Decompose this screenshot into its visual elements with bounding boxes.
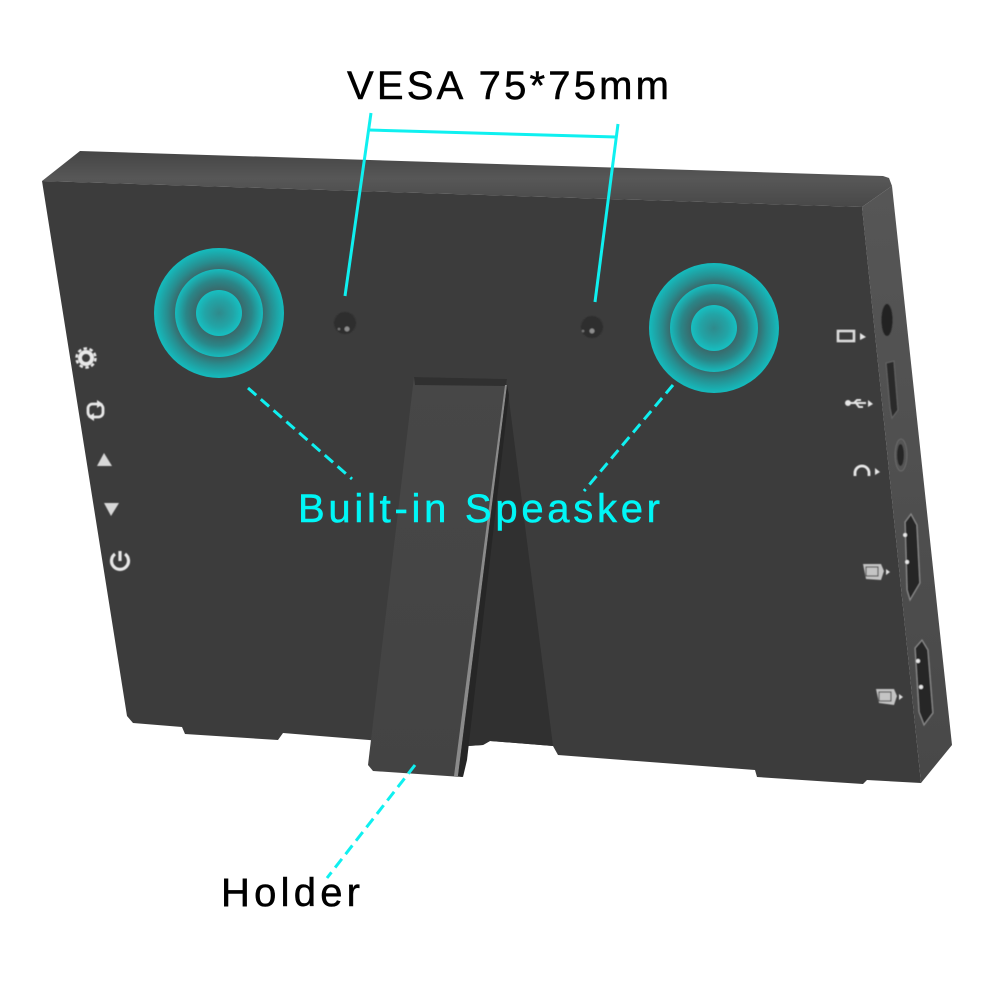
right speaker	[649, 263, 779, 393]
port: HDMI two	[915, 640, 933, 725]
VESA bracket lines	[345, 113, 618, 302]
VESA screw hole right	[581, 316, 603, 338]
right speaker dashed leader	[584, 385, 673, 491]
holder stand	[368, 377, 509, 777]
icon: headphones	[855, 466, 880, 476]
icon: USB port	[846, 400, 873, 407]
icon: up arrow	[97, 453, 112, 466]
icon: HDMI one	[863, 564, 890, 580]
holder label: Holder	[221, 871, 360, 915]
back face of monitor	[42, 181, 921, 784]
port: HDMI one	[903, 514, 920, 600]
holder dashed leader	[327, 765, 415, 878]
icon: down arrow	[104, 503, 119, 516]
icon: power	[112, 551, 129, 569]
built-in speaker label: Built-in Speasker	[298, 487, 660, 531]
monitor body	[42, 151, 952, 784]
VESA screw hole left	[334, 312, 356, 334]
port: audio jack	[895, 439, 907, 471]
icon: HDMI two	[876, 689, 903, 705]
top edge of monitor	[42, 151, 892, 207]
VESA heading: VESA 75*75mm	[347, 64, 669, 108]
port: power jack	[882, 304, 892, 336]
left speaker dashed leader	[248, 388, 352, 479]
icon: battery port	[838, 331, 866, 341]
right side edge of monitor	[862, 186, 952, 783]
icon: input switch loop	[88, 400, 103, 421]
icon: settings gear	[76, 348, 96, 368]
left speaker	[154, 248, 284, 378]
stand shadow	[440, 384, 553, 776]
port: USB	[886, 361, 898, 418]
